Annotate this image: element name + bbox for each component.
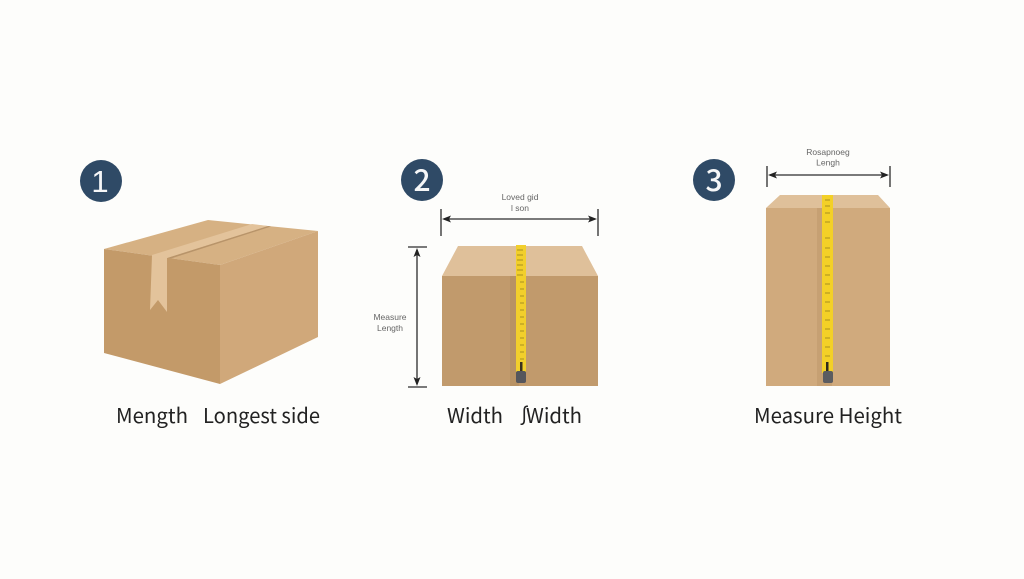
caption: width: Width [447,399,503,429]
caption: width: Width [526,399,582,429]
width dimension arrow [441,209,598,236]
tape measure [822,195,833,383]
top dimension arrow [767,166,890,187]
caption: height: Measure Height [754,399,902,429]
step 3 badge [693,156,735,201]
panel: step 1 [80,160,320,429]
length dimension label: Length [377,323,403,333]
step 2 badge: 2 [413,156,431,200]
width dimension label: l son [511,203,529,213]
panel: step 3 [693,147,902,429]
step 1 badge: 1 [91,164,109,199]
length dimension arrow [408,247,427,387]
illustration: closed cardboard box [104,220,318,384]
caption: length: Mength [116,399,188,429]
tape measure [516,245,526,383]
caption: length [116,399,320,429]
step 1 badge [80,160,122,202]
top dimension label: Lengh [816,158,840,168]
illustration: box front with tape measure [442,245,598,386]
packing tape [150,224,268,312]
step 3 badge: 3 [705,156,723,200]
illustration: tall box with tape measure [766,195,890,386]
tape shadow [167,226,271,258]
width dimension label: Loved gid [502,192,538,202]
step 2 badge [401,156,443,201]
panel: step 2 [373,156,598,429]
length dimension label: Measure [373,312,407,322]
caption: width [447,399,582,429]
caption: width: ∫ [514,399,534,429]
caption: length: Longest side [203,399,320,429]
top dimension label: Rosapnoeg [806,147,850,157]
